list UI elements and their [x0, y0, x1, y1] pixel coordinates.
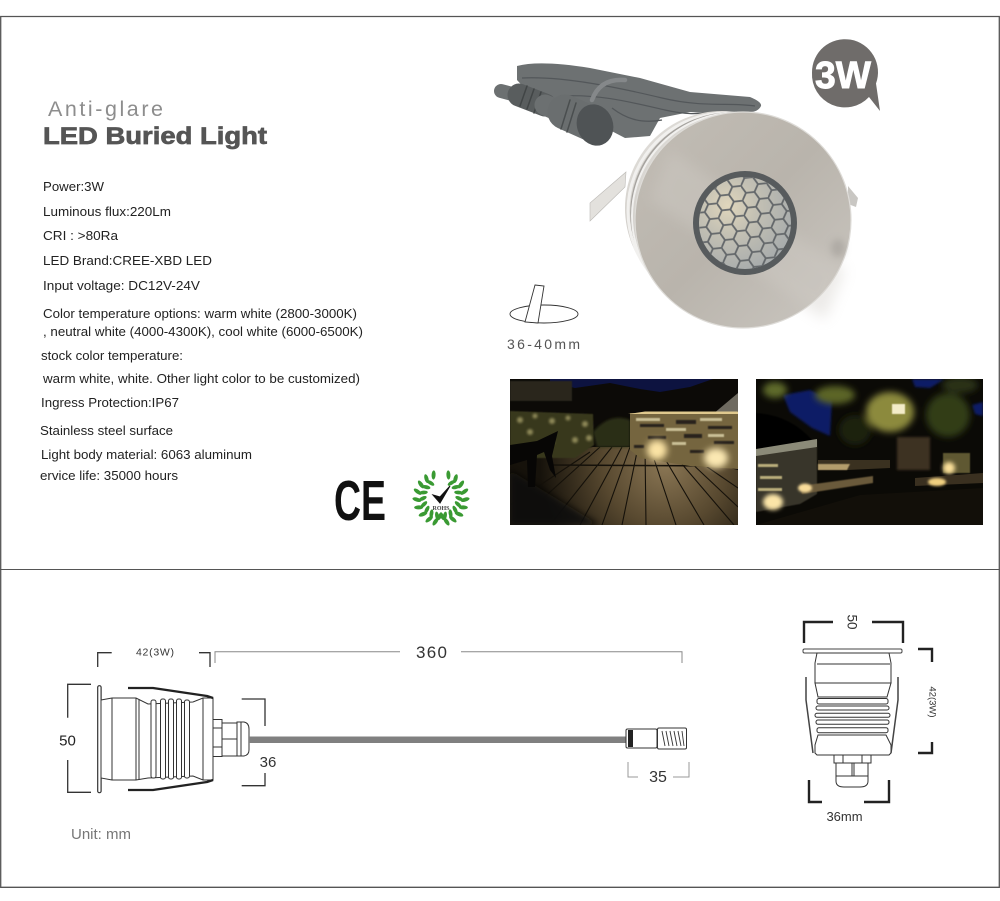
wall top edge	[756, 439, 817, 456]
body outline	[101, 698, 213, 780]
side clips	[806, 677, 898, 753]
icon: RoHS wreath: ROHS	[432, 506, 450, 512]
middle plants	[593, 418, 630, 447]
bracket 35	[628, 762, 689, 777]
bracket 42	[918, 649, 932, 753]
bracket 50	[804, 622, 903, 643]
hedge highlights	[517, 414, 592, 444]
label 360: 360	[416, 643, 447, 662]
specification list: Input voltage: DC12V-24V	[43, 279, 201, 293]
unit label: Unit: mm	[71, 826, 131, 843]
cutout hole icon	[510, 285, 578, 323]
end connector	[626, 728, 686, 749]
specification list: warm white, white. Other light color to be customized)	[42, 372, 360, 386]
title: Anti-glare	[48, 97, 163, 121]
icon: RoHS wreath	[411, 469, 471, 528]
photo: deck wall lighting	[510, 379, 738, 525]
left stone wall	[756, 440, 817, 512]
dark foreground	[510, 470, 600, 525]
label 50 rotated: 50	[844, 614, 859, 630]
label 42 rotated: 42(3W)	[926, 686, 937, 718]
specification list: Stainless steel surface	[40, 424, 173, 438]
specification list: ervice life: 35000 hours	[40, 469, 178, 483]
bottom left glow	[763, 494, 783, 510]
lamp	[892, 404, 905, 414]
cable gland	[213, 720, 249, 756]
lens ring	[693, 171, 797, 275]
deck	[510, 447, 738, 525]
light body	[625, 111, 838, 319]
lens honeycomb	[699, 177, 791, 269]
stone mottling	[634, 418, 734, 453]
right planter	[943, 453, 970, 473]
lit foliage	[763, 377, 978, 445]
cable	[249, 736, 627, 743]
deck planks	[547, 447, 738, 525]
stainless face	[635, 112, 851, 328]
height bracket 50	[68, 684, 91, 792]
floor light	[928, 478, 946, 486]
dark left tree	[756, 413, 812, 450]
hedge	[510, 411, 594, 458]
night sky patches	[783, 379, 983, 436]
label 50: 50	[59, 732, 76, 750]
label 36: 36	[260, 754, 276, 771]
specification list: CRI : >80Ra	[43, 229, 118, 243]
middle step	[800, 476, 873, 494]
wall highlights	[758, 464, 782, 491]
panel: product overview	[40, 39, 983, 533]
specification list: , neutral white (4000-4300K), cool white (6000-6500K)	[43, 325, 363, 339]
wall top light	[628, 412, 738, 414]
specification list: Color temperature options: warm white (2800-3000K)	[43, 307, 357, 321]
badge: 3W: 3W	[815, 55, 871, 97]
width bracket 42	[98, 653, 210, 667]
wall light glows	[647, 440, 667, 460]
canopy	[716, 393, 738, 412]
specification list: Light body material: 6063 aluminum	[41, 448, 252, 462]
icon: CE mark: CE	[334, 469, 386, 533]
top view drawing	[803, 614, 937, 824]
side view drawing	[59, 646, 276, 793]
stone wall	[630, 413, 738, 469]
flange	[803, 649, 902, 653]
gland	[834, 755, 871, 787]
planter light	[943, 462, 955, 474]
connector	[501, 86, 619, 151]
bracket 36	[242, 699, 265, 786]
cutout size label: 36-40mm	[507, 336, 580, 352]
title: LED Buried Light	[43, 123, 267, 150]
specification list: stock color temperature:	[41, 349, 183, 363]
chair	[510, 431, 558, 487]
deck	[756, 488, 983, 525]
face smudge	[831, 239, 845, 257]
face sheen	[650, 150, 845, 320]
photo: garden steps lighting	[756, 377, 983, 525]
specification list: LED Brand:CREE-XBD LED	[43, 254, 212, 268]
title	[43, 97, 267, 150]
label 36mm: 36mm	[826, 809, 863, 824]
badge: 3W	[812, 39, 880, 111]
buildings	[510, 381, 572, 401]
specification list	[40, 180, 363, 483]
upper step strip	[818, 464, 850, 470]
cable bundle	[517, 63, 761, 138]
upper step	[818, 460, 890, 470]
length bracket 360	[215, 652, 682, 663]
specification list: Luminous flux:220Lm	[43, 205, 171, 219]
central shrub and pillar	[897, 437, 930, 470]
panel: dimension drawings	[59, 614, 937, 843]
body	[815, 653, 891, 755]
label 35: 35	[649, 769, 667, 786]
specification list: Power:3W	[43, 180, 104, 194]
second glow	[704, 448, 728, 468]
mounting clips	[590, 172, 626, 221]
label 42: 42(3W)	[136, 646, 174, 658]
flange	[98, 686, 101, 793]
ledge	[915, 473, 983, 486]
specification list: Ingress Protection:IP67	[41, 396, 179, 410]
bracket 36	[809, 780, 889, 802]
sky	[550, 379, 713, 392]
product photo: buried light	[501, 63, 858, 328]
spring clips	[128, 688, 213, 790]
step glow	[798, 484, 812, 492]
right clip	[848, 186, 858, 207]
